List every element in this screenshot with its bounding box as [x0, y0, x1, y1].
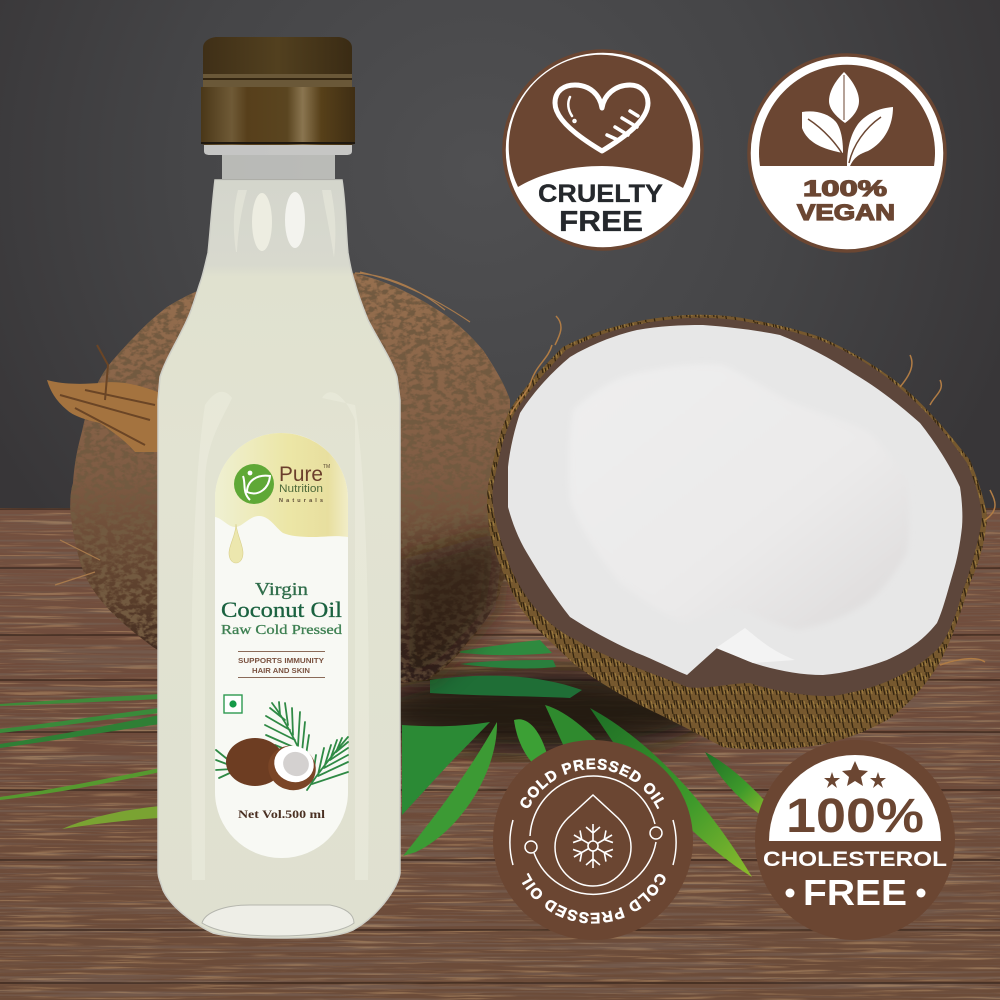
loose fibres — [55, 272, 470, 585]
coconut flesh — [508, 325, 962, 675]
coconut husk — [487, 315, 987, 749]
palm fronds — [216, 702, 348, 790]
product name — [221, 579, 342, 638]
rim highlights — [716, 628, 795, 663]
oil body — [158, 180, 400, 938]
percent text: 100% — [786, 790, 924, 843]
coconut cavity — [569, 364, 909, 630]
bottle cap — [201, 37, 355, 145]
oil drop — [229, 524, 243, 563]
white dome — [769, 755, 941, 841]
label claim — [238, 651, 325, 678]
halved coconut on label — [262, 739, 322, 797]
tuft shading — [60, 345, 155, 445]
product label — [215, 433, 348, 858]
shell rim — [492, 318, 982, 696]
circular text: COLD PRESSED OIL — [520, 758, 664, 810]
bottle — [158, 37, 400, 938]
net volume: Net Vol.500 ml — [238, 809, 325, 821]
label claim: HAIR AND SKIN — [252, 668, 310, 675]
badge: 100% vegan — [749, 55, 945, 251]
dark wall background — [0, 0, 1000, 512]
palm leaves — [0, 640, 766, 877]
product name: Virgin — [255, 579, 308, 599]
left whole coconut — [47, 272, 510, 685]
bottle base — [202, 905, 354, 936]
product name: Raw Cold Pressed — [221, 623, 342, 638]
lower right coconut shadow — [400, 530, 505, 680]
label background — [215, 433, 348, 858]
stars — [824, 761, 886, 788]
circular text — [520, 758, 666, 924]
shadow under coconuts — [370, 670, 710, 754]
icon: oil drop — [555, 795, 631, 886]
brown top half — [759, 65, 935, 166]
cholesterol text: CHOLESTEROL — [763, 848, 947, 871]
badge: cruelty free: FREE — [559, 206, 643, 238]
badge: 100% vegan: VEGAN — [797, 200, 895, 225]
loose husk fibres — [510, 316, 995, 665]
bottle highlights — [191, 190, 369, 880]
clear neck ring — [204, 145, 352, 155]
brand name: TM — [323, 464, 330, 470]
badge disc — [493, 740, 693, 940]
right half coconut — [487, 315, 995, 749]
coconut fibre tuft — [47, 380, 160, 452]
badge: cruelty free — [504, 51, 702, 249]
badge: cold pressed oil — [493, 740, 693, 939]
logo circle — [234, 464, 274, 504]
icon: heart — [555, 85, 648, 151]
clear neck — [222, 155, 335, 179]
dot left — [786, 888, 794, 898]
brand name: Pure — [279, 463, 323, 486]
wooden table — [0, 508, 1000, 1000]
inner rings — [510, 776, 676, 894]
product name: Coconut Oil — [221, 597, 342, 622]
label claim: SUPPORTS IMMUNITY — [238, 656, 324, 665]
badge text: CRUELTY — [538, 180, 663, 208]
dot right — [916, 888, 926, 898]
icon: snowflake — [570, 824, 616, 868]
veg mark — [224, 695, 242, 713]
badge disc — [749, 55, 945, 251]
label cream top — [215, 433, 348, 537]
badge text: 100% — [803, 176, 887, 201]
badge: 100% cholesterol free — [755, 740, 955, 940]
husk texture — [487, 315, 987, 749]
icon: plant leaves — [802, 72, 893, 166]
brand name — [279, 463, 330, 504]
badge disc — [504, 51, 702, 249]
brown top with arch — [509, 55, 693, 188]
free text: FREE — [803, 872, 907, 913]
brand name: Nutrition — [279, 483, 323, 495]
badge disc — [755, 740, 955, 940]
circular text: COLD PRESSED OIL — [522, 872, 666, 924]
brand name: Naturals — [279, 498, 323, 504]
whole coconut on label — [226, 738, 284, 786]
